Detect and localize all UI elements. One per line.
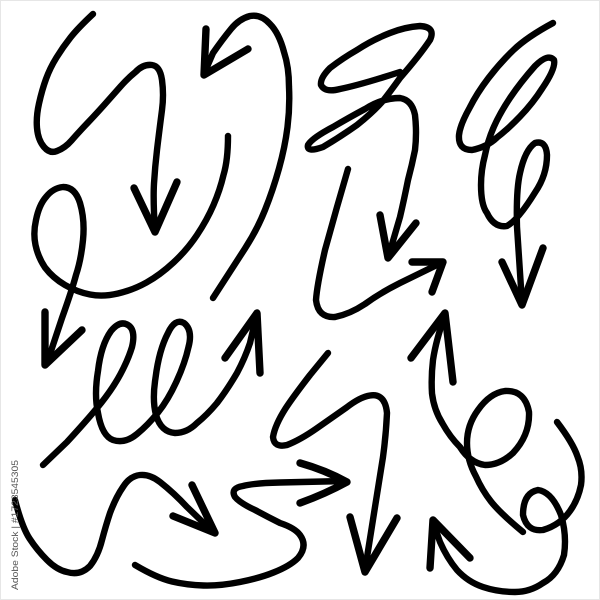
arrow: long arc hooking back to upper left [204, 16, 289, 298]
arrow: bottom S curve pointing right [135, 463, 347, 586]
arrow: bottom-left wave pointing lower right [15, 475, 215, 573]
arrow: top-left S curve pointing down [37, 14, 177, 232]
arrow: right side loop pointing up [411, 313, 529, 532]
arrow: centre bottom zigzag pointing down [273, 353, 397, 572]
arrow: double loop pointing up right [43, 313, 260, 465]
arrow: top centre loops pointing down [308, 26, 432, 258]
arrow: L-shaped pointing right [316, 169, 443, 317]
arrow: top right double loop pointing down [459, 23, 554, 305]
arrow: bottom right loop pointing back left [430, 422, 582, 592]
arrow: curve with loop pointing lower left [34, 136, 228, 365]
stock id caption: Adobe Stock | #1723545305 [10, 460, 21, 590]
